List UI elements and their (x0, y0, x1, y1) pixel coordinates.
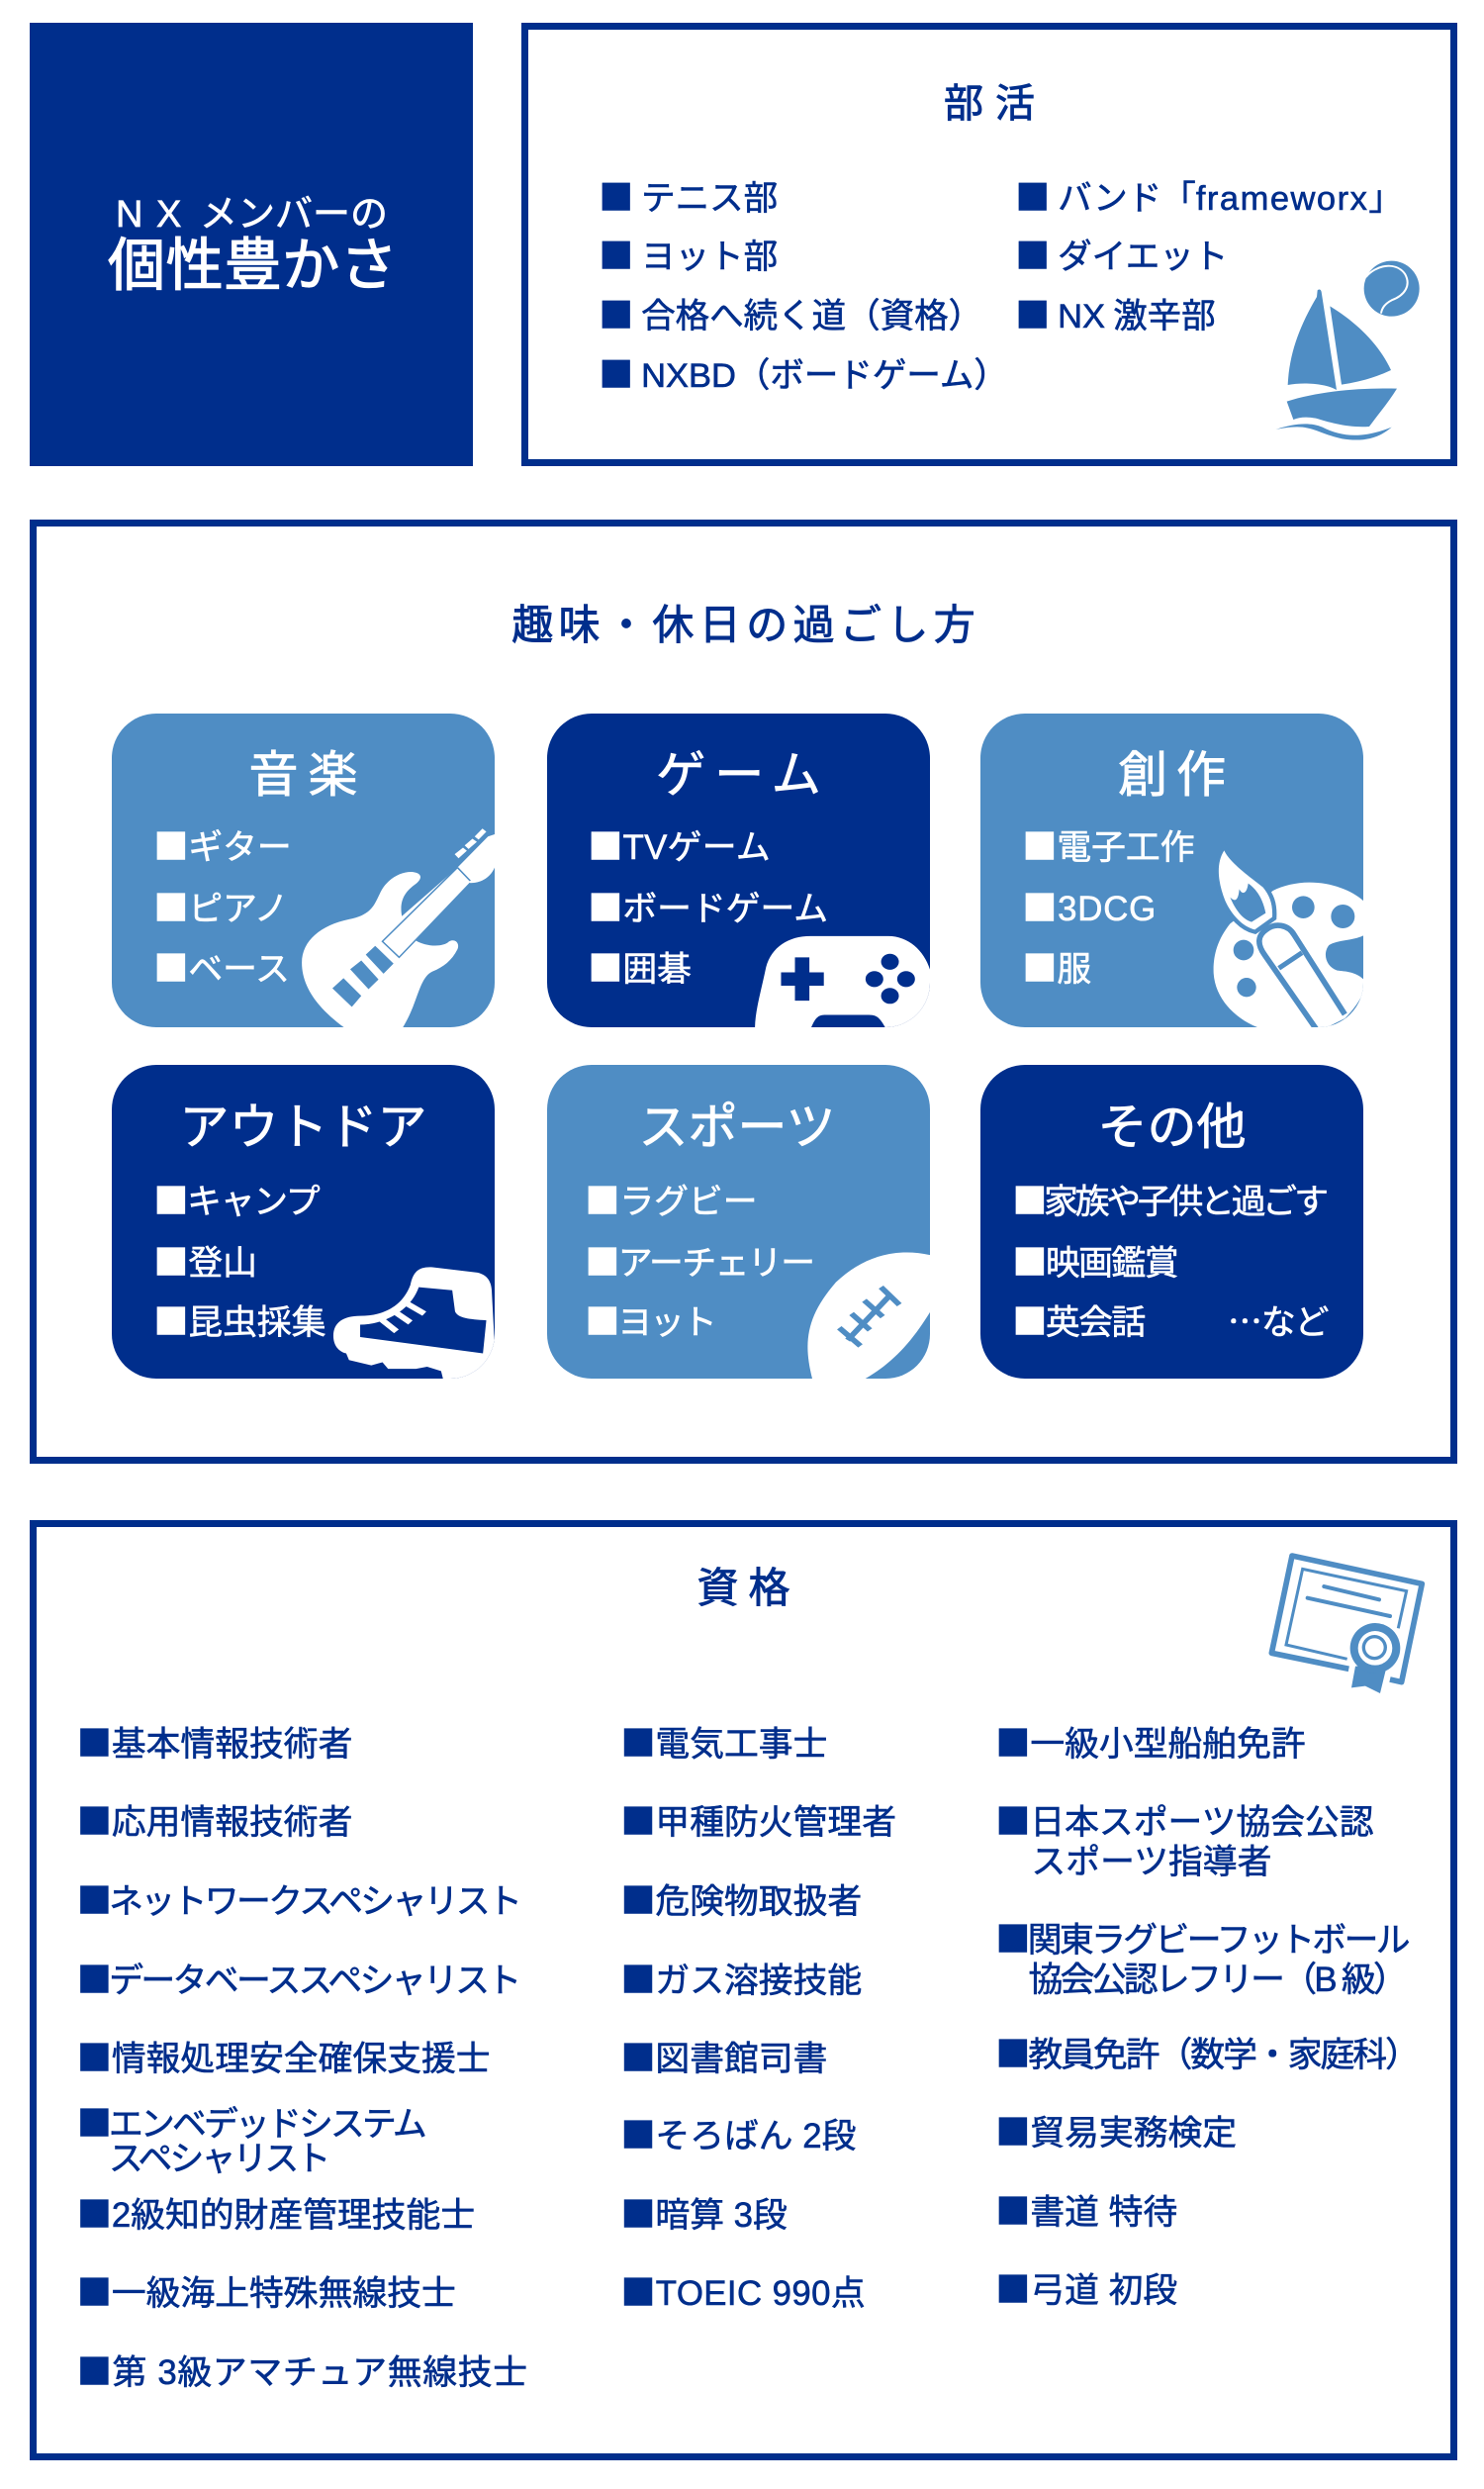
title: NX members: N (116, 194, 142, 236)
card item: ■登山 (154, 1235, 257, 1285)
item: ■第 3級アマチュア無線技士 (77, 2345, 528, 2395)
card: other (980, 1065, 1363, 1379)
title: NX members: X (156, 194, 181, 236)
item: ■日本スポーツ協会公認 (995, 1795, 1374, 1845)
card title: アウトドア (180, 1100, 427, 1155)
item: ■応用情報技術者 (77, 1795, 352, 1845)
club item: ■ ヨット部 (600, 229, 778, 278)
panel: clubs (521, 23, 1457, 466)
card item: ■囲碁 (588, 942, 692, 992)
card title: 音楽 (249, 747, 368, 803)
icon: game controller (755, 936, 930, 1027)
panel: title (30, 23, 473, 466)
icon: rugby ball (807, 1253, 930, 1379)
item: ■一級小型船舶免許 (995, 1716, 1306, 1766)
card item: ■3DCG (1023, 881, 1157, 930)
item: ■危険物取扱者 (621, 1874, 862, 1924)
item: ■そろばん 2段 (621, 2109, 856, 2158)
icon: certificate (1268, 1553, 1425, 1693)
icon: sailboat and tennis ball (1276, 261, 1420, 439)
qualification list: column 2 (621, 1725, 938, 2314)
item: ■情報処理安全確保支援士 (77, 2032, 491, 2081)
card item: ■TVゲーム (588, 820, 771, 870)
card item: ■アーチェリー (586, 1235, 814, 1285)
item: ■ガス溶接技能 (621, 1954, 862, 2003)
item: ■書道 特待 (995, 2185, 1177, 2235)
card item: ■ピアノ (154, 881, 289, 930)
card title: 創作 (1118, 747, 1235, 803)
item: ■図書館司書 (621, 2032, 827, 2081)
item: ■弓道 初段 (995, 2263, 1177, 2313)
card item: ■キャンプ (154, 1174, 319, 1223)
title: diversity: 個性豊かさ (108, 234, 399, 297)
card item: ■ギター (154, 820, 292, 870)
club item: ■ NXBD（ボードゲーム） (600, 347, 1008, 397)
title: NX members (116, 194, 388, 236)
item: ■電気工事士 (621, 1716, 827, 1766)
card item: ■映画鑑賞 (1013, 1235, 1177, 1285)
icon: shoe (332, 1267, 495, 1379)
item continuation: スペシャリスト (109, 2140, 328, 2178)
card item: ■電子工作 (1023, 820, 1195, 870)
heading: clubs: 部活 (944, 81, 1047, 125)
item: ■エンベデッドシステム (77, 2097, 424, 2147)
club item: ■ テニス部 (600, 170, 778, 220)
item: ■ネットワークスペシャリスト (77, 1874, 519, 1924)
card: crafts (980, 714, 1363, 1027)
item continuation: 協会公認レフリー（B 級） (1029, 1961, 1405, 1999)
card item: ■ボードゲーム (588, 881, 828, 930)
qualification list: column 1 (77, 1716, 528, 2395)
card title: その他 (1098, 1100, 1247, 1155)
item: ■貿易実務検定 (995, 2106, 1237, 2155)
card item: ■ベース (154, 942, 290, 992)
item: ■一級海上特殊無線技士 (77, 2266, 456, 2316)
card title: スポーツ (639, 1100, 835, 1155)
icon: palette and brush (1213, 851, 1363, 1027)
card item: ■家族や子供と過ごす (1013, 1174, 1326, 1223)
card: outdoors (112, 1065, 495, 1379)
card: games (547, 714, 930, 1027)
item: ■関東ラグビーフットボール (995, 1913, 1408, 1962)
title: NX members: メンバーの (200, 194, 388, 236)
card item: ■ラグビー (586, 1174, 758, 1223)
item continuation: スポーツ指導者 (1031, 1843, 1271, 1881)
item: ■甲種防火管理者 (621, 1795, 896, 1845)
item: ■2級知的財産管理技能士 (77, 2188, 475, 2238)
card title: ゲーム (656, 747, 830, 803)
card item: ■服 (1023, 942, 1091, 992)
card note: …など (1228, 1295, 1328, 1345)
heading: qualifications: 資格 (696, 1564, 799, 1611)
qualification list: column 3 (995, 1725, 1431, 2314)
card item: ■昆虫採集 (154, 1295, 326, 1345)
item: ■基本情報技術者 (77, 1716, 352, 1766)
card: music (112, 714, 495, 1027)
heading: hobbies: 趣味・休日の過ごし方 (511, 602, 980, 648)
card item: ■英会話 (1013, 1295, 1145, 1345)
panel: hobbies (30, 520, 1457, 1464)
item: ■教員免許（数学・家庭科） (995, 2028, 1418, 2077)
item: ■暗算 3段 (621, 2188, 788, 2238)
club item: ■ NX 激辛部 (1015, 288, 1216, 337)
item: ■データベーススペシャリスト (77, 1954, 519, 2003)
club item: ■ 合格へ続く道（資格） (600, 288, 982, 337)
card item: ■ヨット (586, 1295, 715, 1345)
panel: qualifications (30, 1520, 1457, 2460)
club item: ■ バンド「frameworx」 (1015, 170, 1403, 220)
card: sports (547, 1065, 930, 1379)
club item: ■ ダイエット (1015, 229, 1228, 278)
item: ■TOEIC 990点 (621, 2266, 866, 2316)
icon: guitar (302, 828, 495, 1027)
